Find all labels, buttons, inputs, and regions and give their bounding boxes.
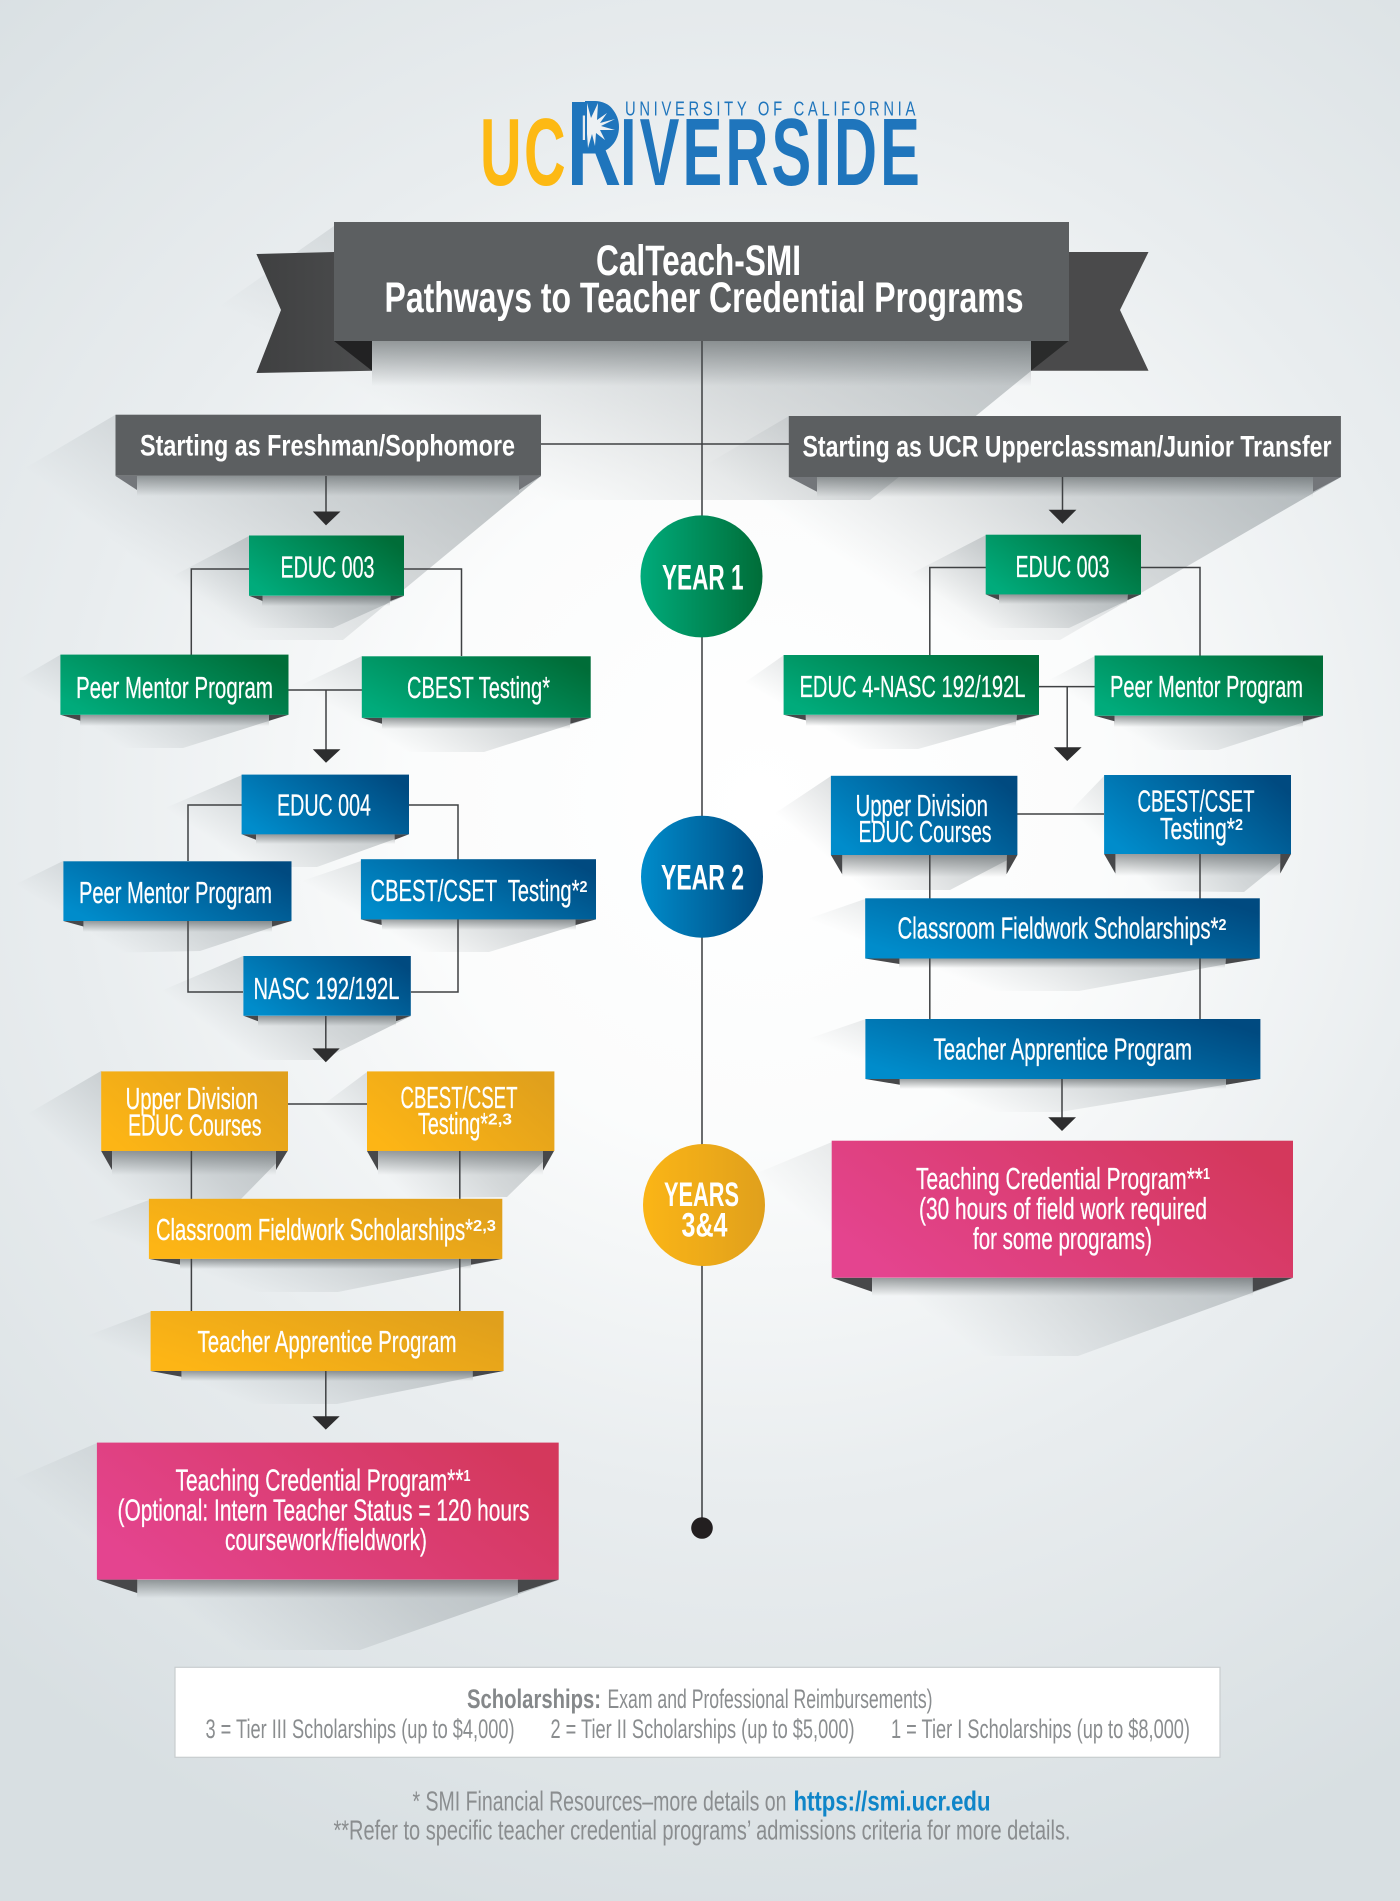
left pathway connectors and arrows bbox=[188, 476, 462, 1430]
scholarships legend panel: Exam and Professional Reimbursements) bbox=[608, 1684, 932, 1714]
milestone: Year 1 bbox=[640, 515, 762, 637]
scholarships legend panel: 2 = Tier II Scholarships (up to $5,000) bbox=[550, 1714, 854, 1744]
heading: Starting as UCR Upperclassman/Junior Transfer bbox=[789, 416, 1341, 492]
timeline end dot bbox=[691, 1517, 713, 1539]
logo: UC Riverside: UC bbox=[480, 99, 568, 206]
scholarships legend panel: 1 = Tier I Scholarships (up to $8,000) bbox=[891, 1714, 1190, 1744]
box: EDUC 4-NASC 192/192L bbox=[784, 655, 1039, 720]
milestone: Years 3 and 4: 3&4 bbox=[682, 1207, 728, 1245]
box: Classroom Fieldwork Scholarships (left): 2,3 bbox=[473, 1218, 496, 1235]
scholarships legend panel: Scholarships: bbox=[467, 1684, 601, 1714]
box: Teacher Apprentice Program (right) bbox=[865, 1019, 1260, 1085]
box: Upper Division EDUC Courses (left) bbox=[101, 1071, 288, 1170]
scholarships legend panel bbox=[175, 1667, 1220, 1757]
box: EDUC 4-NASC 192/192L: EDUC 4-NASC 192/192L bbox=[800, 669, 1026, 704]
box: Classroom Fieldwork Scholarships (left): Classroom Fieldwork Scholarships* bbox=[156, 1212, 473, 1247]
box: Classroom Fieldwork Scholarships (right) bbox=[865, 898, 1260, 964]
box: CBEST/CSET Testing (left, years 3 and 4): 2,3 bbox=[488, 1112, 512, 1128]
connector: starting boxes horizontal line bbox=[541, 443, 789, 445]
box: Peer Mentor Program (left, year 2) bbox=[63, 861, 292, 926]
title ribbon banner bbox=[256, 222, 1148, 373]
box: CBEST/CSET Testing (right): CBEST/CSET bbox=[1138, 784, 1255, 819]
box: NASC 192/192L: NASC 192/192L bbox=[254, 971, 400, 1006]
box: Teaching Credential Program (left): 1 bbox=[464, 1468, 471, 1485]
box: Teaching Credential Program (right) bbox=[832, 1141, 1293, 1292]
box: Peer Mentor Program (right): Peer Mentor Program bbox=[1110, 669, 1303, 704]
footnotes bbox=[334, 1786, 1070, 1846]
long cast shadows behind boxes bbox=[0, 226, 1341, 1650]
box: CBEST Testing (left, year 1): CBEST Testing* bbox=[407, 670, 550, 705]
box: CBEST/CSET Testing (left, years 3 and 4): Testing* bbox=[418, 1106, 488, 1141]
title ribbon banner: Pathways to Teacher Credential Programs bbox=[384, 274, 1024, 322]
box: Teacher Apprentice Program (left): Teacher Apprentice Program bbox=[198, 1324, 456, 1359]
box: Teaching Credential Program (right): for some programs) bbox=[973, 1221, 1152, 1256]
heading: Starting as Freshman/Sophomore bbox=[116, 415, 541, 490]
box: CBEST/CSET Testing (left, year 2): CBEST/CSET Testing* bbox=[370, 873, 580, 908]
box: Upper Division EDUC Courses (right): Upper Division bbox=[856, 788, 988, 823]
box: Classroom Fieldwork Scholarships (right): 2 bbox=[1218, 917, 1227, 934]
box: Peer Mentor Program (left, year 1): Peer Mentor Program bbox=[76, 670, 273, 705]
box: EDUC 003 (left) bbox=[249, 536, 404, 601]
box: CBEST/CSET Testing (right) bbox=[1104, 775, 1291, 874]
box: EDUC 003 (right) bbox=[986, 535, 1141, 600]
box: Teaching Credential Program (right): 1 bbox=[1203, 1166, 1210, 1183]
box: Teacher Apprentice Program (left) bbox=[151, 1311, 504, 1377]
box: CBEST/CSET Testing (left, years 3 and 4): CBEST/CSET bbox=[400, 1080, 518, 1115]
heading: Starting as Freshman/Sophomore: Starting as Freshman/Sophomore bbox=[140, 430, 515, 463]
box: Teaching Credential Program (right): Teaching Credential Program** bbox=[916, 1161, 1203, 1196]
box: Upper Division EDUC Courses (right): EDUC Courses bbox=[858, 814, 992, 849]
box: Peer Mentor Program (left, year 2): Peer Mentor Program bbox=[79, 875, 272, 910]
logo: UC Riverside: R bbox=[567, 75, 621, 211]
box: EDUC 004 (left) bbox=[242, 775, 409, 840]
title ribbon banner: CalTeach-SMI bbox=[596, 237, 801, 285]
box: Teaching Credential Program (left): coursework/fieldwork) bbox=[225, 1522, 427, 1557]
timeline: central vertical line bbox=[701, 341, 703, 1528]
right pathway connectors and arrows bbox=[930, 477, 1200, 1131]
box: CBEST/CSET Testing (right): 2 bbox=[1235, 817, 1243, 834]
logo: UC Riverside: UNIVERSITY OF CALIFORNIA bbox=[625, 99, 919, 121]
milestone: Years 3 and 4 bbox=[643, 1144, 765, 1266]
box: EDUC 004 (left): EDUC 004 bbox=[277, 787, 371, 822]
box: Teaching Credential Program (left): Teaching Credential Program** bbox=[176, 1462, 464, 1498]
box: CBEST/CSET Testing (left, year 2) bbox=[361, 859, 596, 925]
box: CBEST/CSET Testing (left, years 3 and 4) bbox=[367, 1071, 554, 1170]
scholarships legend panel: 3 = Tier III Scholarships (up to $4,000) bbox=[206, 1714, 514, 1744]
milestone: Year 1: YEAR 1 bbox=[662, 558, 744, 597]
box: Peer Mentor Program (left, year 1) bbox=[60, 655, 289, 721]
box: Upper Division EDUC Courses (right) bbox=[831, 776, 1017, 874]
milestone: Years 3 and 4: YEARS bbox=[664, 1176, 739, 1214]
box: Peer Mentor Program (right) bbox=[1095, 656, 1323, 721]
box: CBEST Testing (left, year 1) bbox=[362, 656, 591, 724]
box: Classroom Fieldwork Scholarships (right): Classroom Fieldwork Scholarships* bbox=[898, 911, 1218, 946]
box: EDUC 003 (right): EDUC 003 bbox=[1016, 549, 1110, 584]
logo: UC Riverside: IVERSIDE bbox=[620, 99, 923, 206]
box: Teaching Credential Program (left) bbox=[97, 1443, 559, 1593]
box: Classroom Fieldwork Scholarships (left) bbox=[149, 1199, 502, 1265]
box: CBEST/CSET Testing (right): Testing* bbox=[1160, 811, 1235, 846]
footnotes: https://smi.ucr.edu bbox=[794, 1786, 990, 1816]
footnotes: **Refer to specific teacher credential programs’ admissions criteria for more details. bbox=[334, 1814, 1070, 1846]
box: CBEST/CSET Testing (left, year 2): 2 bbox=[580, 879, 588, 896]
box: Teaching Credential Program (left): (Optional: Intern Teacher Status = 120 hours bbox=[118, 1492, 530, 1528]
box: NASC 192/192L bbox=[243, 956, 411, 1021]
milestone: Year 2 bbox=[641, 816, 763, 938]
footnotes: * SMI Financial Resources–more details on bbox=[412, 1786, 786, 1816]
box: EDUC 003 (left): EDUC 003 bbox=[280, 550, 374, 585]
logo: UC Riverside bbox=[480, 75, 923, 211]
box: Teacher Apprentice Program (right): Teacher Apprentice Program bbox=[934, 1031, 1192, 1066]
box: Upper Division EDUC Courses (left): Upper Division bbox=[126, 1081, 258, 1116]
box: Teaching Credential Program (right): (30 hours of field work required bbox=[919, 1191, 1207, 1226]
milestone: Year 2: YEAR 2 bbox=[661, 858, 744, 898]
box: Upper Division EDUC Courses (left): EDUC Courses bbox=[128, 1108, 262, 1143]
